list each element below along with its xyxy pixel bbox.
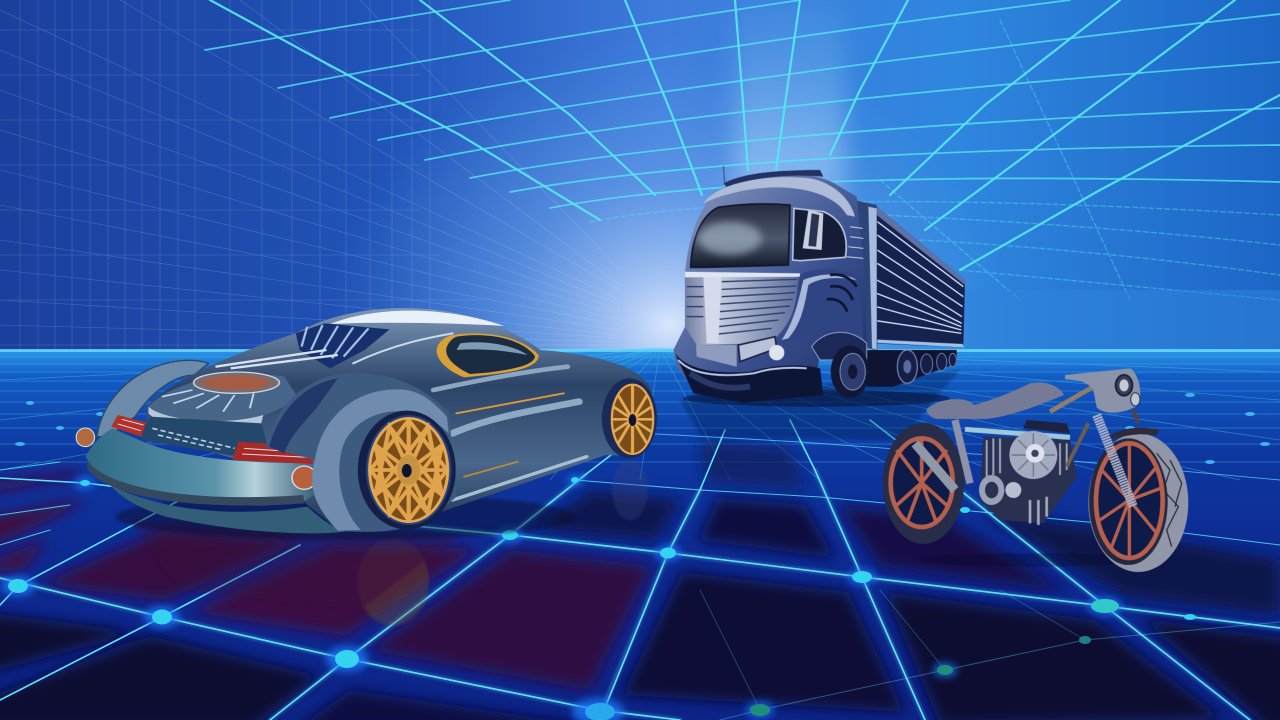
ceiling perspective grid: [205, 0, 1280, 300]
truck lower bumper: [675, 337, 823, 403]
motorcycle fender: [1109, 428, 1159, 440]
truck front wheel: [812, 332, 869, 398]
car engine vents: [296, 323, 390, 368]
motorcycle fairing: [1065, 368, 1140, 423]
truck door panel stripes: [847, 227, 863, 258]
truck grille: [685, 272, 800, 345]
motorcycle front wheel: [1088, 433, 1188, 572]
car bumper: [85, 428, 346, 533]
motorcycle rear wheel: [883, 423, 964, 544]
car side panel highlights: [353, 333, 587, 500]
floor: [0, 348, 1280, 720]
motorcycle: [883, 368, 1188, 572]
car rear wheel arch: [265, 373, 456, 532]
motorcycle frame tube: [965, 429, 1070, 437]
ceiling cross lines: [205, 0, 1280, 208]
left wall fine grid: [0, 0, 620, 350]
reflections of vehicles on the floor: [130, 370, 960, 626]
background sky gradient: [0, 0, 1280, 352]
motorcycle seat and tank: [927, 382, 1064, 419]
ceiling rays: [210, 0, 1280, 270]
car tail lights: [111, 415, 313, 464]
motorcycle engine: [979, 387, 1093, 525]
car roof highlight: [330, 311, 504, 326]
truck rear wheels: [867, 350, 957, 387]
motorcycle shadow: [920, 553, 1140, 567]
truck shadow: [683, 390, 950, 407]
floor tiles: [0, 440, 1280, 720]
car front wheel: [602, 378, 657, 458]
motorcycle fork: [1097, 415, 1133, 507]
truck: [673, 166, 965, 407]
car rear deck: [148, 350, 338, 429]
car round lamps: [76, 428, 316, 489]
motorcycle exhaust: [915, 443, 955, 490]
truck roof: [703, 166, 855, 217]
car rear wheel: [358, 411, 456, 529]
car main body: [147, 308, 655, 530]
car shadow: [116, 493, 575, 540]
truck fender sweep: [782, 270, 863, 343]
floor far glow dots: [15, 393, 1270, 464]
floor glowing nodes: [1, 475, 1196, 720]
floor main grid lines: [0, 420, 1280, 720]
floor fine grid: [0, 348, 1280, 480]
truck windshield: [691, 204, 790, 267]
truck trailer: [857, 201, 965, 351]
sports car: [76, 308, 657, 540]
right wall band: [965, 290, 1280, 352]
car rear center panel: [139, 417, 269, 457]
truck side window: [793, 208, 846, 261]
truck cab body: [673, 173, 867, 400]
car cockpit canopy: [437, 333, 539, 377]
car rear fin: [97, 360, 209, 437]
motorcycle frame rear strut: [955, 420, 970, 483]
